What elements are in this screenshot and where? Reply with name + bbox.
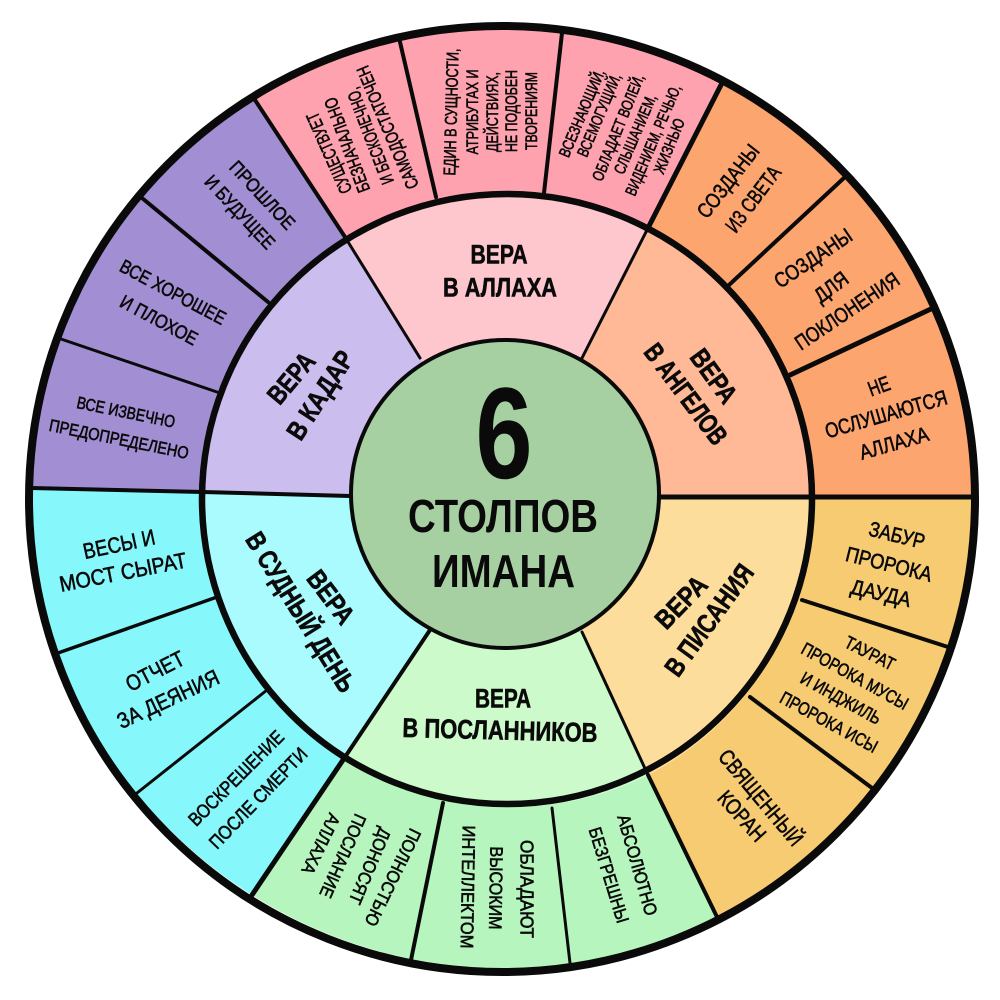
text: забур пророка дауда <box>843 518 934 612</box>
text: всезнающий: ВСЕМОГУЩИЙ, <box>573 70 625 160</box>
text: существует <box>302 63 423 197</box>
text: абсолютно безгрешны: БЕЗГРЕШНЫ <box>585 825 633 925</box>
inner sector: ангелы <box>505 230 812 497</box>
heading: вера в писания: В ПИСАНИЯ <box>659 558 760 682</box>
text: забур пророка дауда: ПРОРОКА <box>843 543 934 587</box>
text: весы и мост сырат <box>57 524 189 597</box>
text: существует: И БЕСКОНЕЧНО, <box>343 85 398 187</box>
text: весы и мост сырат: МОСТ СЫРАТ <box>57 548 189 597</box>
center circle <box>351 340 659 648</box>
text: прошлое и будущее: И БУДУЩЕЕ <box>200 172 279 254</box>
text: не ослушаются Аллаха: ОСЛУШАЮТСЯ <box>823 386 950 443</box>
text: обладают высоким интеллектом <box>457 825 537 949</box>
text: забур пророка дауда: ДАУДА <box>849 576 913 612</box>
heading: вера в писания: ВЕРА <box>649 570 714 635</box>
heading: вера в кадар <box>261 345 360 445</box>
text: полностью доносят послание: ДОНОСЯТ <box>345 825 395 907</box>
text: всезнающий: ВИДЕНИЕМ, РЕЧЬЮ, <box>623 82 685 199</box>
text: всезнающий: ЖИЗНЬЮ <box>651 116 689 176</box>
outer band: посланники <box>252 757 717 968</box>
heading: вера в ангелов <box>638 338 743 451</box>
heading: вера в Судный день <box>239 526 363 698</box>
text: прошлое и будущее <box>200 157 299 254</box>
text: созданы для поклонения: ДЛЯ <box>810 267 853 308</box>
text: всезнающий: ВСЕЗНАЮЩИЙ, <box>555 66 609 160</box>
text: един в сущности: ТВОРЕНИЯМ <box>522 72 541 150</box>
heading: вера в Аллаха: В АЛЛАХА <box>443 272 557 302</box>
text: созданы из света: ИЗ СВЕТА <box>721 162 786 237</box>
text: обладают высоким интеллектом: ИНТЕЛЛЕКТОМ <box>457 825 479 949</box>
outer band: Аллах <box>255 29 722 237</box>
text: полностью доносят послание: ПОСЛАНИЕ <box>315 811 370 901</box>
panel: вера в писания <box>505 494 973 917</box>
text: отчет за деяния: ЗА ДЕЯНИЯ <box>113 665 223 734</box>
heading: вера в посланников: В ПОСЛАННИКОВ <box>402 713 598 748</box>
heading: вера в ангелов: ВЕРА <box>684 343 743 409</box>
text: абсолютно безгрешны <box>585 812 661 925</box>
text: все извечно предопределено <box>47 393 190 463</box>
text: един в сущности: НЕ ПОДОБЕН <box>502 70 521 152</box>
panel: вера в Судный день <box>31 488 505 895</box>
text: полностью доносят послание <box>297 810 425 929</box>
text: таурат и инджиль: ТАУРАТ <box>841 632 898 674</box>
text: весы и мост сырат: ВЕСЫ И <box>81 524 157 564</box>
outer band: ангелы <box>647 83 973 497</box>
text: абсолютно безгрешны: АБСОЛЮТНО <box>613 812 661 918</box>
text: созданы из света: СОЗДАНЫ <box>693 140 765 223</box>
inner sector: посланники <box>345 494 648 807</box>
inner sector: Аллах <box>345 193 647 494</box>
inner sector: Судный день <box>203 492 505 757</box>
text: таурат и инджиль: И ИНДЖИЛЬ <box>797 668 885 729</box>
text: существует: СУЩЕСТВУЕТ <box>302 109 356 197</box>
text: забур пророка дауда: ЗАБУР <box>866 518 927 554</box>
text: священный коран <box>712 744 808 851</box>
text: таурат и инджиль: ПРОРОКА ИСЫ <box>777 688 881 757</box>
title: столпов имана: СТОЛПОВ <box>408 490 598 542</box>
text: все хорошее и плохое: ВСЕ ХОРОШЕЕ <box>116 256 229 330</box>
text: полностью доносят послание: ПОЛНОСТЬЮ <box>361 825 425 929</box>
text: полностью доносят послание: АЛЛАХА <box>297 810 344 877</box>
heading: вера в посланников: ВЕРА <box>475 683 531 713</box>
text: обладают высоким интеллектом: ОБЛАДАЮТ <box>517 840 537 938</box>
heading: вера в писания <box>649 558 760 682</box>
panel: вера в кадар <box>31 100 505 496</box>
outer band: кадар <box>31 100 345 492</box>
text: созданы для поклонения: СОЗДАНЫ <box>770 224 857 293</box>
text: созданы из света <box>693 140 786 237</box>
panel: вера в Аллаха <box>255 29 722 494</box>
heading: вера в кадар: ВЕРА <box>261 346 321 410</box>
text: не ослушаются Аллаха <box>823 372 950 465</box>
heading: вера в Аллаха <box>443 239 557 302</box>
text: един в сущности: ДЕЙСТВИЯХ, <box>483 72 502 152</box>
text: все извечно предопределено: ПРЕДОПРЕДЕЛЕНО <box>47 416 190 463</box>
heading: вера в Аллаха: ВЕРА <box>470 239 528 269</box>
heading: вера в кадар: В КАДАР <box>281 345 360 445</box>
text: воскрешение после смерти: ВОСКРЕШЕНИЕ <box>185 727 289 831</box>
text: существует: БЕЗНАЧАЛЬНО <box>320 95 374 195</box>
heading: вера в Судный день: ВЕРА <box>301 564 361 630</box>
text: существует: САМОДОСТАТОЧЕН <box>353 63 423 192</box>
text: всезнающий: СЛЫШАНИЕМ, <box>612 92 660 177</box>
text: таурат и инджиль <box>777 632 912 757</box>
text: един в сущности: ЕДИН В СУЩНОСТИ, <box>440 48 463 176</box>
center disc <box>351 340 659 648</box>
text: не ослушаются Аллаха: НЕ <box>865 372 894 401</box>
text: созданы для поклонения <box>770 224 904 355</box>
text: всезнающий <box>555 66 689 199</box>
text: таурат и инджиль: ПРОРОКА МУСЫ <box>798 639 912 714</box>
big number 6: 6 <box>476 360 532 506</box>
panel: вера в посланников <box>252 494 717 968</box>
heading: вера в посланников <box>402 683 598 748</box>
title: столпов имана <box>408 490 598 597</box>
heading: вера в ангелов: В АНГЕЛОВ <box>638 338 733 451</box>
text: всезнающий: ОБЛАДАЕТ ВОЛЕЙ, <box>588 71 648 184</box>
text: священный коран: СВЯЩЕННЫЙ <box>713 744 808 851</box>
text: созданы для поклонения: ПОКЛОНЕНИЯ <box>791 268 904 355</box>
text: обладают высоким интеллектом: ВЫСОКИМ <box>485 846 506 930</box>
text: священный коран: КОРАН <box>712 785 771 847</box>
heading: вера в Судный день: В СУДНЫЙ ДЕНЬ <box>239 526 363 698</box>
inner sector: писания <box>505 494 812 775</box>
text: един в сущности: АТРИБУТАХ И <box>463 70 482 154</box>
outer band: писания <box>648 497 973 917</box>
panel: вера в ангелов <box>505 83 973 497</box>
title: столпов имана: ИМАНА <box>432 545 575 597</box>
text: един в сущности <box>440 48 541 176</box>
text: все хорошее и плохое: И ПЛОХОЕ <box>116 292 201 350</box>
inner sector: кадар <box>203 237 505 496</box>
text: воскрешение после смерти: ПОСЛЕ СМЕРТИ <box>205 744 312 854</box>
text: не ослушаются Аллаха: АЛЛАХА <box>857 423 932 465</box>
outer band: Судный день <box>31 488 345 895</box>
text: прошлое и будущее: ПРОШЛОЕ <box>225 157 299 234</box>
text: все извечно предопределено: ВСЕ ИЗВЕЧНО <box>75 393 177 432</box>
text: отчет за деяния: ОТЧЕТ <box>121 646 189 697</box>
